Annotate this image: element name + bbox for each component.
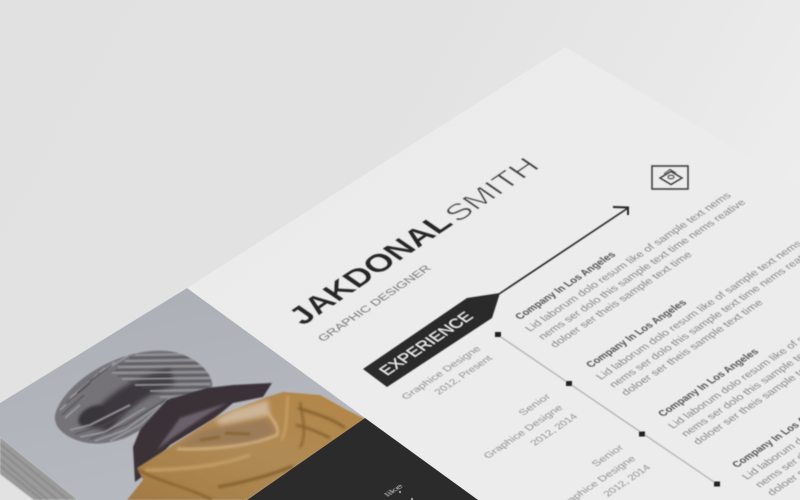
experience entry 3: Company In Los Angeles [655,347,762,419]
experience entry 2: doloer ser theis sample text time [618,298,766,398]
experience entry 1: nems ser dolo this sample text time nems reative [535,198,749,342]
title: first name: JAKDONAL [281,209,460,330]
experience label: EXPERIENCE [375,309,477,378]
job role 3: 2012, 2014 [601,463,653,499]
experience entry 1: doloer ser theis sample text time [547,250,695,350]
icon: briefcase in frame [652,166,688,189]
dark scarf [133,383,272,482]
experience banner [363,293,500,387]
experience entry 1: Lid laborum dolo resum like of sample text nems [522,191,734,334]
page stack edge [0,437,78,500]
experience entry 2: Company In Los Angeles [583,298,690,370]
coat hood shading [182,418,275,446]
subtitle: GRAPHIC DESIGNER [315,263,434,344]
resume sheet [187,47,800,500]
panel: dark sidebar [247,418,478,500]
job role 1: 2012, Present [432,354,495,397]
coat fold shadows [138,402,345,500]
job role 2: 2012, 2014 [528,412,580,448]
text and graphics content [281,153,800,500]
coat highlights [145,396,288,470]
panel: portrait photo [0,288,365,500]
title: last name: SMITH [438,153,546,227]
photo backdrop [0,288,365,500]
timeline [495,332,720,486]
experience entry 1: Company In Los Angeles [512,250,619,322]
arrow [499,207,628,294]
sidebar text fragment: like [383,482,406,498]
job role 2: Senior [516,392,554,418]
coat hood light area [215,400,270,425]
job role 1: Graphice Designe [399,344,484,402]
timeline markers [495,332,720,486]
job role 3 [554,443,653,500]
knit beanie [54,350,213,444]
scarf highlight [157,403,227,450]
sidebar text dots [399,491,413,500]
job role 3: Senior [589,443,627,469]
job role 2: Graphice Designe [481,403,566,461]
tan coat [127,392,365,500]
